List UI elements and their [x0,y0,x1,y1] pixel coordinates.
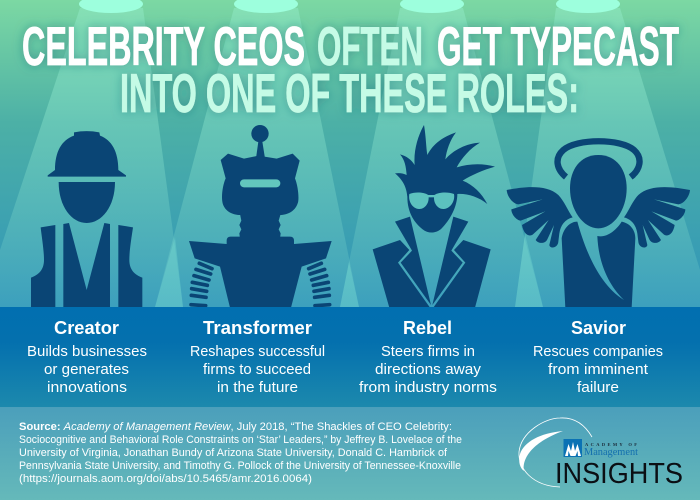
figure: rebel [373,125,495,308]
role: creator: Builds businesses [27,344,147,360]
source text: (https://journals.aom.org/doi/abs/10.5465/amr.2016.0064) [19,473,312,485]
role: creator: Creator [54,318,119,338]
source text: University of Virginia, Jonathan Bundy of Arizona State University, Donald C. Hambrick of [19,447,448,459]
title: OFTEN [317,15,423,77]
title: CELEBRITY CEOS [22,15,305,77]
logo: academy of management insights: ACADEMY OF [585,442,637,447]
role: rebel: Rebel [403,318,452,338]
role: transformer: Transformer [203,318,312,338]
source text: Pennsylvania State University, and Timothy G. Pollock of the University of Tennessee-Knoxville [19,460,461,472]
blue role band [0,307,700,407]
logo: academy of management insights: Management [584,446,638,458]
role: savior: Savior [571,318,626,338]
role: creator: or generates [44,362,129,378]
role: creator: innovations [47,380,127,396]
role: transformer [190,318,325,396]
role: savior: from imminent [548,362,648,378]
role: transformer: in the future [217,380,298,396]
figure: creator [31,131,142,308]
source text [19,421,462,485]
logo: academy of management insights [519,418,683,490]
spotlights [0,0,700,307]
role: creator [27,318,147,396]
source text: Source: Academy of Management Review, July 2018, “The Shackles of CEO Celebrity: [19,421,452,433]
title [22,15,679,124]
footer panel [0,407,700,500]
role: rebel [359,318,497,396]
stage background [0,0,700,308]
role: rebel: Steers firms in [381,344,475,360]
role: rebel: directions away [375,362,482,378]
source text: Sociocognitive and Behavioral Role Constraints on ‘Star’ Leaders,” by Jeffrey B. Lovelace of the [19,434,462,446]
role: transformer: firms to succeed [203,362,311,378]
figure: savior angel [507,141,690,308]
role: savior: failure [577,380,619,396]
role: savior [533,318,663,396]
role: savior: Rescues companies [533,344,663,360]
role: rebel: from industry norms [359,380,497,396]
figure: transformer robot [189,125,332,308]
logo: academy of management insights: INSIGHTS [555,458,683,490]
role: transformer: Reshapes successful [190,344,325,360]
